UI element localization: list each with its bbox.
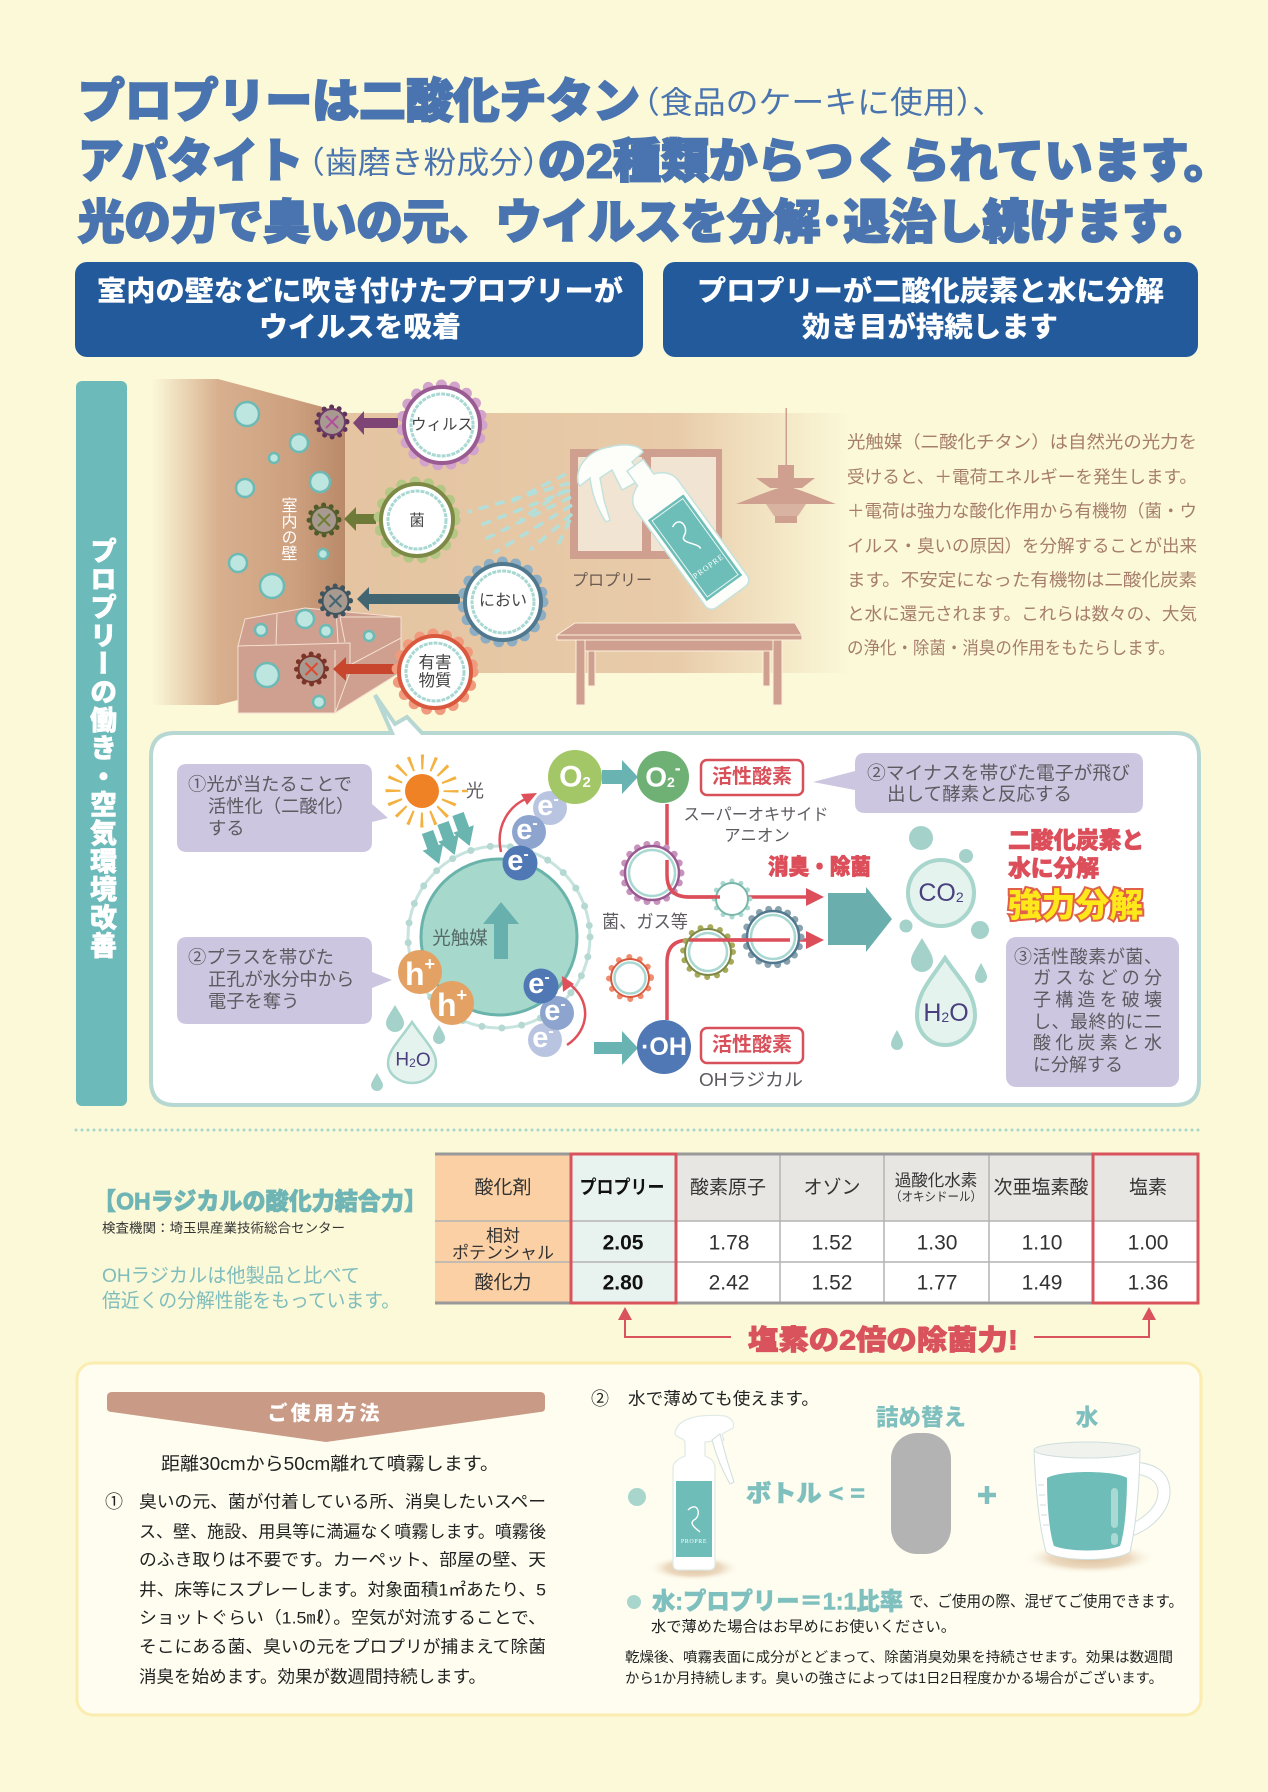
electrons: e	[544, 995, 560, 1027]
explanation text: 受けると、＋電荷エネルギーを発生します。	[847, 467, 1197, 487]
label: superoxide anion: スーパーオキサイド	[684, 806, 828, 824]
window	[570, 449, 722, 559]
explanation text: ＋電荷は強力な酸化作用から有機物（菌・ウ	[847, 501, 1197, 521]
label: bottle equals: ボトル < =	[746, 1480, 865, 1508]
OH radical: ·OH	[641, 1033, 687, 1061]
superoxide: O	[645, 762, 667, 792]
red routes	[667, 804, 808, 1020]
heading: decomposition	[1008, 827, 1144, 924]
arrow to superoxide	[602, 760, 638, 794]
comparison table: 1.52	[812, 1232, 852, 1254]
water drop left: H	[395, 1050, 409, 1070]
callout 2: 正孔が水分中から	[208, 968, 354, 990]
badge: active oxygen top: 活性酸素	[712, 765, 792, 788]
icon: sun	[393, 762, 484, 820]
back wall	[345, 413, 850, 673]
photocatalyst sphere	[408, 846, 590, 1028]
heading: deodorize: 消臭・除菌	[768, 854, 871, 880]
CO2 bubble	[900, 826, 989, 939]
callout 1: ①光が当たることで	[188, 774, 352, 794]
title: （歯磨き粉成分）	[292, 146, 555, 180]
comparison table: 2.42	[709, 1272, 749, 1294]
callout 3: 酸化炭素と水	[1033, 1033, 1162, 1053]
light arrows	[417, 810, 480, 868]
O2 molecule: O	[559, 760, 582, 794]
electrons: e	[528, 968, 544, 1000]
heading: refill: 詰め替え	[876, 1404, 966, 1430]
harmful substance badge: 物質	[418, 671, 452, 690]
panel: photocatalyst mechanism	[151, 695, 1199, 1105]
callout 3: ③活性酸素が菌、	[1014, 947, 1162, 967]
usage distance: 距離30cmから50cm離れて噴霧します。	[161, 1454, 499, 1474]
H2O drop right	[891, 938, 987, 1050]
heading: OH radical oxidation	[93, 1188, 427, 1236]
note text: OHラジカルは他製品と比べて	[102, 1265, 360, 1287]
callout top right: 出して酵素と反応する	[887, 784, 1072, 804]
heading: decomposition: 強力分解	[1008, 886, 1143, 924]
title: の2種類からつくられています。	[538, 134, 1232, 188]
H2O drop right: O	[949, 999, 969, 1027]
ratio line	[627, 1588, 1183, 1636]
label: superoxide anion: アニオン	[724, 827, 790, 845]
comparison table: 酸化剤	[474, 1176, 532, 1198]
comparison table: 過酸化水素	[895, 1171, 977, 1190]
heading: OH radical oxidation: 検査機関：埼玉県産業技術総合センター	[102, 1220, 345, 1236]
table	[557, 623, 802, 705]
wall label: 室内の壁	[278, 497, 298, 561]
banner: ご使用方法	[268, 1401, 382, 1425]
electrons: e	[532, 1022, 548, 1054]
left wall	[152, 379, 345, 705]
explanation text: イルス・臭いの原因）を分解することが出来	[847, 536, 1197, 556]
callout 3: ガスなどの分	[1033, 968, 1162, 988]
callout 3	[1006, 937, 1179, 1087]
callout 1: 活性化（二酸化）	[208, 796, 354, 816]
usage step 1	[105, 1492, 546, 1686]
H2O drop right: 2	[941, 1009, 949, 1025]
photocatalyst sphere: 光触媒	[432, 928, 488, 948]
electrons: e	[507, 845, 523, 877]
sofa	[238, 608, 401, 713]
callout 1	[177, 764, 388, 852]
measuring cup	[1024, 1442, 1170, 1574]
comparison table: 酸素原子	[690, 1176, 766, 1198]
harmful substance badge	[397, 634, 473, 710]
usage note	[625, 1649, 1173, 1686]
callout top right: ②マイナスを帯びた電子が飛び	[867, 762, 1130, 784]
side bar: プロプリーの働き・空気環境改善	[86, 537, 116, 960]
H2O drop right: H	[923, 999, 941, 1027]
superoxide: 2	[667, 774, 675, 790]
big arrow	[828, 887, 892, 952]
spray bottle: PROPRE	[691, 552, 726, 581]
title: アパタイト	[78, 134, 303, 188]
usage step 1: 井、床等にスプレーします。対象面積1㎡あたり、5	[139, 1580, 546, 1600]
heading box right	[663, 262, 1198, 357]
comparison table: 次亜塩素酸	[994, 1176, 1088, 1198]
callout 1: する	[208, 818, 245, 838]
callout 2: ②プラスを帯びた	[188, 946, 334, 968]
bubbles on wall	[229, 402, 374, 708]
usage note: から1か月持続します。臭いの強さによっては1日2日程度かかる場合がございます。	[625, 1670, 1163, 1686]
usage step 1: のふき取りは不要です。カーペット、部屋の壁、天	[139, 1550, 546, 1570]
callout 3: 子構造を破壊	[1033, 990, 1162, 1010]
holes: h	[437, 987, 457, 1023]
callout: twice chlorine: 塩素の2倍の除菌力!	[748, 1324, 1018, 1356]
title	[78, 74, 1232, 248]
OH arrow	[594, 1031, 638, 1065]
comparison table: オゾン	[803, 1176, 861, 1198]
label: bacteria gas: 菌、ガス等	[602, 912, 688, 932]
holes: +	[457, 985, 467, 1005]
comparison table: 塩素	[1129, 1176, 1167, 1198]
usage step 2: ②	[591, 1389, 609, 1409]
bottle: PROPRE	[681, 1539, 707, 1545]
small blocked gears	[296, 407, 350, 684]
callout 3: し、最終的に二	[1033, 1012, 1162, 1032]
refill pack	[891, 1433, 951, 1554]
badge: active oxygen bottom: 活性酸素	[712, 1033, 792, 1056]
comparison table: プロプリー	[580, 1176, 664, 1198]
label: OH radical: OHラジカル	[699, 1070, 803, 1090]
odor badge	[463, 562, 543, 642]
comparison table: 1.77	[917, 1272, 957, 1294]
title: （食品のケーキに使用）、	[627, 86, 1005, 120]
badge: active oxygen top	[701, 760, 803, 795]
explanation text: と水に還元されます。これらは数々の、大気	[847, 604, 1197, 624]
comparison table: （オキシドール）	[890, 1190, 982, 1204]
panel: usage	[77, 1363, 1201, 1715]
spray bottle	[578, 445, 752, 612]
heading: OH radical oxidation: 【OHラジカルの酸化力結合力】	[93, 1188, 427, 1216]
electrons	[502, 790, 574, 1057]
red arrowheads	[806, 888, 824, 949]
comparison table: 1.00	[1128, 1232, 1168, 1254]
heading box right: 効き目が持続します	[802, 310, 1058, 342]
plus sign	[978, 1486, 996, 1504]
holes: +	[425, 954, 435, 974]
holes: h	[405, 956, 425, 992]
water drop left: 2	[409, 1056, 416, 1070]
OH radical	[637, 1020, 691, 1074]
electrons: -	[523, 846, 529, 862]
comparison table: 1.52	[812, 1272, 852, 1294]
electrons: -	[560, 996, 566, 1012]
heading: decomposition: 二酸化炭素と	[1008, 827, 1144, 853]
comparison table: 2.80	[603, 1272, 643, 1294]
virus badge	[402, 385, 482, 465]
callout 2	[177, 937, 392, 1024]
comparison table: 1.78	[709, 1232, 749, 1254]
arrows to wall	[333, 411, 460, 681]
heading box left: 室内の壁などに吹き付けたプロプリーが	[97, 274, 623, 306]
electrons: -	[553, 790, 559, 808]
water drop left: O	[416, 1050, 431, 1070]
small gears	[609, 844, 801, 999]
electrons: -	[548, 1022, 554, 1040]
note text	[102, 1265, 400, 1312]
bullet	[628, 1488, 646, 1506]
explanation text	[847, 432, 1197, 658]
explanation text: の浄化・除菌・消臭の作用をもたらします。	[847, 638, 1175, 658]
usage step 1: ショットぐらい（1.5㎖）。空気が対流することで、	[139, 1608, 546, 1628]
title: 光の力で臭いの元、ウイルスを分解･退治し続けます。	[78, 196, 1210, 248]
usage step 1: そこにある菌、臭いの元をプロプリが捕まえて除菌	[139, 1638, 546, 1656]
label: product name: プロプリー	[572, 572, 652, 590]
usage step 1: 臭いの元、菌が付着している所、消臭したいスペー	[139, 1492, 546, 1512]
curved arrows	[500, 793, 585, 1045]
comparison table: ポテンシャル	[452, 1244, 554, 1262]
room scene	[152, 379, 850, 713]
superoxide: -	[675, 758, 681, 778]
usage note: 乾燥後、噴霧表面に成分がとどまって、除菌消臭効果を持続させます。効果は数週間	[625, 1649, 1173, 1665]
usage step 1: 消臭を始めます。効果が数週間持続します。	[139, 1668, 486, 1686]
ratio line: 水で薄めた場合はお早めにお使いください。	[651, 1618, 956, 1636]
comparison table: 1.30	[917, 1232, 957, 1254]
CO2 bubble: CO	[918, 879, 956, 907]
heading box right: プロプリーが二酸化炭素と水に分解	[697, 274, 1164, 306]
comparison table: 酸化力	[474, 1272, 532, 1294]
usage step 1: ①	[105, 1492, 123, 1512]
explanation text: 光触媒（二酸化チタン）は自然光の光力を	[847, 432, 1197, 452]
banner	[107, 1392, 545, 1442]
electrons: -	[544, 968, 550, 986]
note text: 倍近くの分解性能をもっています。	[102, 1290, 400, 1312]
badge: active oxygen bottom	[701, 1028, 803, 1063]
usage step 2: 水で薄めても使えます。	[628, 1388, 819, 1408]
explanation text: ます。不安定になった有機物は二酸化炭素	[847, 570, 1197, 590]
O2 molecule	[548, 750, 602, 804]
heading box left	[75, 262, 643, 357]
callout top right	[813, 753, 1143, 813]
usage step 1: ス、壁、施設、用具等に満遍なく噴霧します。噴霧後	[139, 1522, 546, 1542]
odor badge: におい	[479, 592, 527, 610]
comparison table: 1.10	[1022, 1232, 1062, 1254]
callout 2: 電子を奪う	[208, 990, 299, 1012]
electrons: -	[532, 814, 538, 832]
CO2 bubble: 2	[956, 889, 964, 905]
bottle	[648, 1415, 740, 1581]
comparison table	[435, 1153, 1198, 1304]
heading: decomposition: 水に分解	[1008, 855, 1099, 881]
comparison table: 1.36	[1128, 1272, 1168, 1294]
side bar	[76, 381, 127, 1106]
title: プロプリーは二酸化チタン	[78, 74, 640, 128]
harmful substance badge: 有害	[418, 653, 452, 672]
bacteria badge: 菌	[409, 512, 425, 530]
O2 molecule: 2	[582, 774, 591, 790]
electrons: e	[516, 814, 532, 846]
electrons: e	[537, 790, 553, 822]
comparison table: 2.05	[603, 1232, 644, 1254]
virus badge: ウィルス	[411, 416, 473, 434]
label: superoxide anion	[684, 806, 828, 845]
comparison table: 相対	[486, 1226, 520, 1246]
lamp	[736, 408, 836, 523]
heading box left: ウイルスを吸着	[259, 312, 461, 342]
callout: twice chlorine	[618, 1307, 1156, 1356]
bacteria badge	[379, 482, 455, 558]
superoxide	[637, 751, 689, 803]
water drop left	[371, 1005, 445, 1091]
spray mist	[468, 474, 572, 553]
holes	[398, 950, 474, 1025]
callout 3: に分解する	[1033, 1055, 1123, 1075]
ratio line: で、ご使用の際、混ぜてご使用できます。	[909, 1592, 1183, 1610]
comparison table: 1.49	[1022, 1272, 1062, 1294]
ratio line: 水:プロプリー＝1:1比率	[652, 1588, 903, 1616]
icon: sun: 光	[466, 781, 484, 801]
heading: water: 水	[1076, 1404, 1098, 1430]
